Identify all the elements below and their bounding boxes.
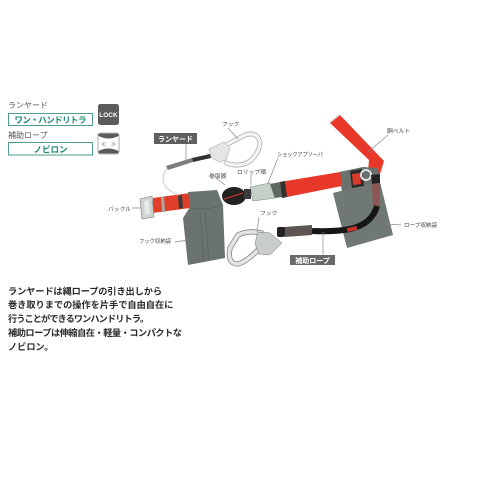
belt: right section (280, 172, 342, 198)
rope pouch (333, 167, 393, 248)
shock absorber and D-ring (250, 181, 287, 201)
part labels: 胴ベルト (387, 128, 410, 135)
auxiliary rope heading: 補助ロープ (8, 130, 48, 140)
part labels: フック (260, 210, 278, 217)
product diagram: harness belt (108, 114, 437, 265)
label: lanyard: ランヤード (158, 136, 193, 144)
icon: stretch: ≪ (101, 142, 106, 148)
icon: stretch (98, 133, 119, 154)
label: lanyard (154, 133, 197, 144)
legend: product specs (8, 101, 119, 155)
description text: ノビロン。 (8, 341, 53, 352)
description text (8, 286, 182, 352)
retractor (222, 187, 251, 205)
leader lines (132, 128, 401, 255)
auxiliary rope (277, 206, 377, 237)
description text: 補助ロープは伸縮自在・軽量・コンパクトな (8, 327, 182, 338)
chest belt upper strap (329, 114, 384, 174)
part labels: フック収納袋 (139, 237, 171, 245)
part labels: バックル (108, 206, 131, 213)
buckle (140, 196, 154, 219)
belt: adjuster bar (161, 196, 165, 212)
lanyard type box: ワン・ハンドリトラ (14, 115, 86, 125)
part labels: フック (222, 121, 240, 128)
label: auxiliary rope: 補助ロープ (295, 256, 330, 265)
hook pouch (183, 190, 225, 265)
auxiliary rope type box: ノビロン (33, 144, 68, 154)
part labels (108, 121, 437, 245)
pouch buckle (350, 169, 380, 206)
description text: 巻き取りまでの操作を片手で自由自在に (8, 299, 173, 310)
lanyard heading: ランヤード (8, 101, 48, 110)
part labels: ロリップ環 (237, 169, 266, 176)
belt: left section (153, 193, 190, 213)
part labels: 巻取器 (209, 172, 227, 180)
label: auxiliary rope (290, 255, 335, 265)
belt: keeper loop (178, 195, 183, 209)
icon: lock: LOCK (99, 112, 118, 119)
part labels: ロープ収納袋 (404, 221, 437, 229)
lanyard strap (163, 154, 211, 195)
part labels: ショックアブソーバ (277, 150, 323, 158)
upper hook (209, 134, 260, 165)
description text: 行うことができるワンハンドリトラ。 (8, 313, 149, 324)
icon: stretch: ≫ (111, 142, 116, 148)
description text: ランヤードは縄ロープの引き出しから (8, 286, 162, 296)
lower hook (229, 232, 282, 264)
